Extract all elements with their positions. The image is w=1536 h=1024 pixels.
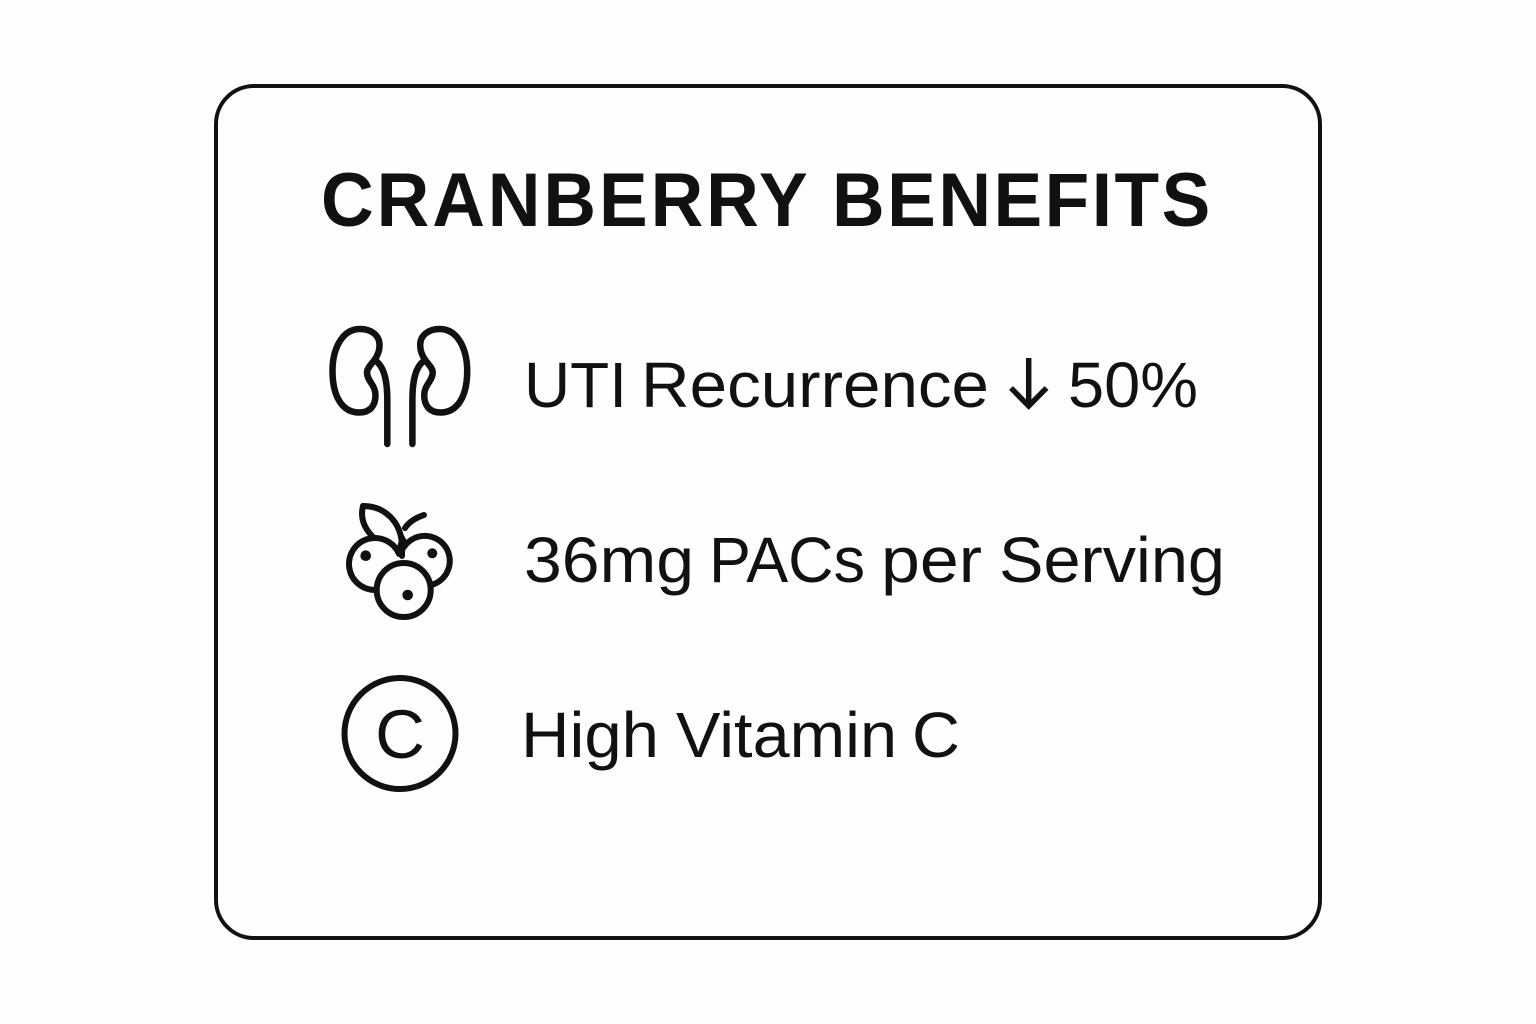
row 3 text: high vitamin C: High xyxy=(521,699,659,771)
icon: kidneys xyxy=(332,329,467,444)
title: BENEFITS xyxy=(832,158,1210,242)
row 2 text: PACs per serving: PACs xyxy=(709,524,865,596)
row 1 text: UTI recurrence: UTI xyxy=(524,349,627,421)
row 2 text: PACs per serving xyxy=(524,524,1225,596)
row 2 text: PACs per serving: per xyxy=(881,524,982,596)
panel: cranberry benefits card xyxy=(216,86,1320,938)
row 1 value: 50%: 50% xyxy=(1068,349,1198,421)
icon: vitamin C circle xyxy=(344,678,456,789)
row 2 text: PACs per serving: 36mg xyxy=(524,524,694,596)
row 3 text: high vitamin C: C xyxy=(912,699,960,771)
title xyxy=(321,158,1210,242)
title: CRANBERRY xyxy=(321,158,808,242)
icon: cranberries xyxy=(349,506,450,617)
row 3 text: high vitamin C: Vitamin xyxy=(676,699,897,771)
icon: vitamin C circle: C xyxy=(375,696,425,773)
row 2 text: PACs per serving: Serving xyxy=(999,524,1225,596)
row 3 text: high vitamin C xyxy=(521,699,960,771)
row 1 text: UTI recurrence: Recurrence xyxy=(641,349,989,421)
icon: down arrow xyxy=(1011,358,1046,406)
